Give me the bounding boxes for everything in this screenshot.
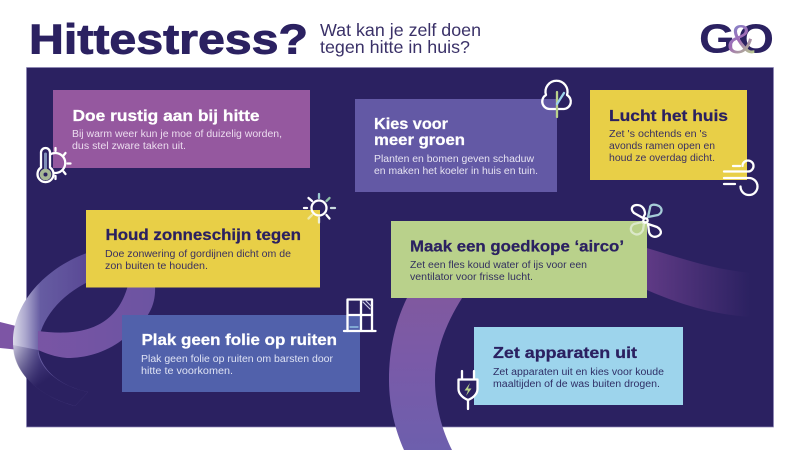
- card: Doe rustig aan bij hitte: [53, 90, 310, 168]
- body text: maaltijden of de was buiten drogen.: [493, 379, 660, 390]
- body text: Zet 's ochtends en 's: [609, 129, 707, 140]
- logo: G&O: O: [738, 16, 774, 62]
- subtitle: tegen hitte in huis?: [320, 37, 470, 57]
- body text: Zet een fles koud water of ijs voor een: [410, 260, 587, 271]
- body text: [141, 354, 334, 377]
- icon: fan: [631, 205, 662, 237]
- ribbon: large bottom curve: [389, 292, 466, 450]
- body text: en maken het koeler in huis en tuin.: [374, 166, 538, 177]
- icon: sun: [304, 194, 335, 222]
- body text: [609, 129, 715, 164]
- body text: [72, 129, 282, 152]
- body text: houd ze overdag dicht.: [609, 153, 715, 164]
- body text: Doe zonwering of gordijnen dicht om de: [105, 249, 291, 260]
- card: Houd zonneschijn tegen: [86, 210, 320, 288]
- body text: dus stel zware taken uit.: [72, 141, 186, 152]
- heading: Zet apparaten uit: [493, 345, 637, 362]
- card: Plak geen folie op ruiten: [122, 315, 360, 392]
- body text: Plak geen folie op ruiten om barsten door: [141, 354, 334, 365]
- body text: [493, 367, 664, 390]
- heading: Plak geen folie op ruiten: [142, 332, 337, 349]
- body text: [105, 249, 291, 272]
- body text: [410, 260, 587, 283]
- heading: Doe rustig aan bij hitte: [72, 108, 260, 125]
- body text: [374, 154, 538, 177]
- body text: Zet apparaten uit en kies voor koude: [493, 367, 664, 378]
- heading: Kies voor: [374, 116, 448, 133]
- icon: window: [344, 300, 376, 331]
- body text: zon buiten te houden.: [105, 261, 208, 272]
- card: Maak een goedkope airco: [391, 221, 647, 298]
- card: Lucht het huis: [590, 90, 747, 180]
- icon: thermometer and sun: [38, 148, 70, 182]
- subtitle: [320, 20, 481, 57]
- icon: plug: [458, 371, 478, 409]
- heading: Maak een goedkope ‘airco’: [410, 238, 624, 256]
- heading: Houd zonneschijn tegen: [106, 227, 301, 244]
- body text: ventilator voor frisse lucht.: [410, 272, 533, 283]
- card: Kies voor meer groen: [355, 99, 557, 192]
- heading: meer groen: [374, 132, 465, 149]
- logo: G&O: &: [727, 16, 755, 62]
- main panel background: [26, 68, 774, 427]
- body text: Bij warm weer kun je moe of duizelig worden,: [72, 129, 282, 140]
- icon: wind: [724, 161, 758, 195]
- heading: [374, 116, 465, 149]
- subtitle: Wat kan je zelf doen: [320, 20, 481, 40]
- body text: avonds ramen open en: [609, 141, 715, 152]
- card: Zet apparaten uit: [474, 327, 683, 405]
- ribbon: right fade: [640, 246, 752, 317]
- body text: Planten en bomen geven schaduw: [374, 154, 535, 165]
- body text: hitte te voorkomen.: [141, 366, 233, 377]
- logo: G&O: [699, 16, 774, 62]
- title: Hittestress?: [29, 16, 308, 62]
- heading: Lucht het huis: [609, 108, 728, 125]
- icon: tree: [542, 81, 571, 117]
- logo: G&O: G: [699, 16, 735, 62]
- ribbon: left loop: [0, 252, 155, 406]
